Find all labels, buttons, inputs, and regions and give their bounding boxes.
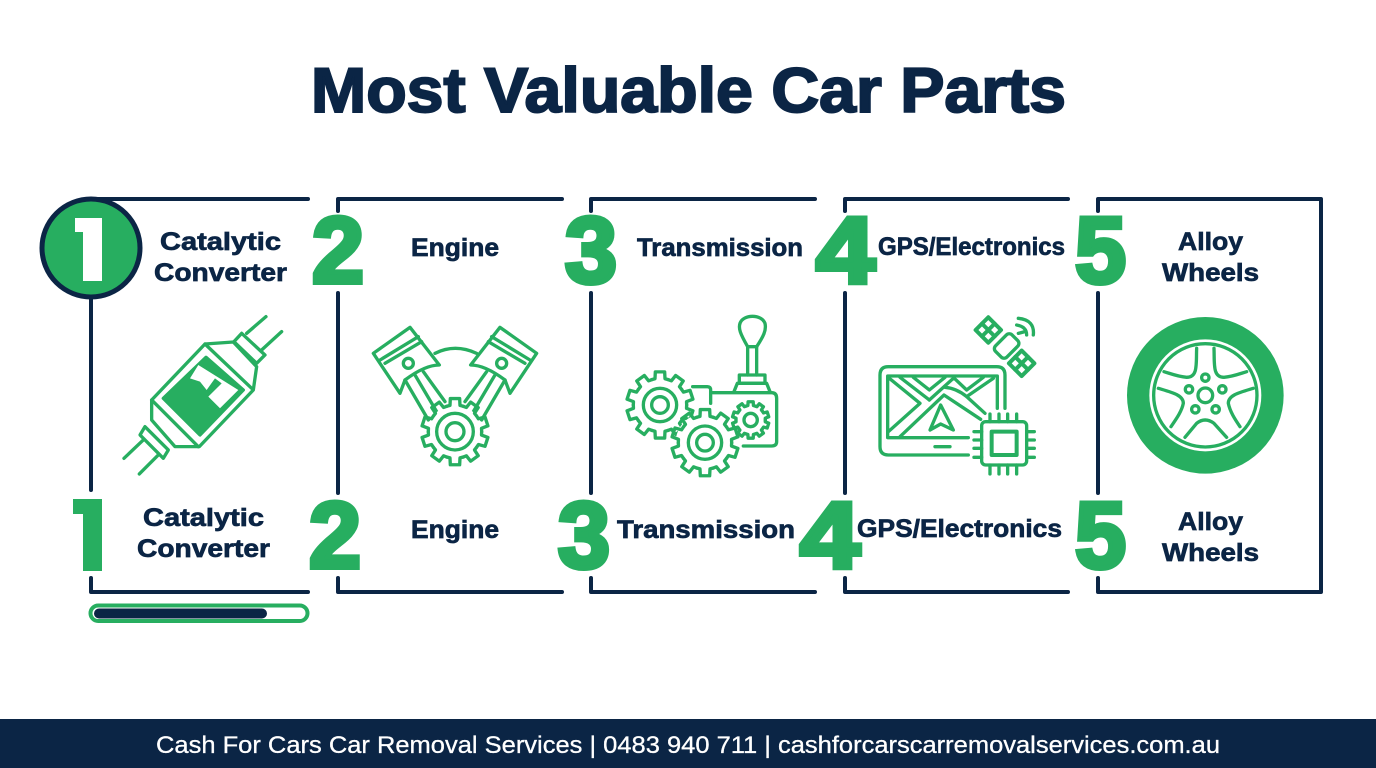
label: catalytic converter lower (137, 504, 270, 563)
icon: transmission (626, 316, 777, 476)
number: 3 upper: 3 (565, 198, 617, 302)
number: 4 upper: 4 (816, 198, 875, 302)
number: 5 upper: 5 (1075, 198, 1126, 302)
footer (0, 719, 1376, 768)
label: transmission lower: Transmission (617, 516, 795, 544)
icon: alloy wheel (1127, 317, 1284, 474)
badge: number 1 (42, 199, 140, 300)
title: Most Valuable Car Parts (311, 56, 1066, 126)
badge: number 1: 1 (66, 200, 117, 300)
heading: catalytic converter: Converter (154, 259, 287, 287)
heading: alloy wheels (1162, 228, 1259, 287)
number: 5 lower: 5 (1075, 482, 1126, 588)
icon: catalytic converter (124, 317, 282, 474)
label: catalytic converter lower: Catalytic (143, 504, 264, 532)
label: alloy wheels lower (1162, 508, 1259, 567)
footer: Cash For Cars Car Removal Services | 0483 940 711 | cashforcarscarremovalservices.com.au (156, 732, 1220, 759)
label: alloy wheels lower: Wheels (1162, 539, 1259, 567)
number: 2 upper: 2 (312, 198, 364, 302)
panel: engine (309, 198, 562, 592)
number: 3 lower: 3 (558, 482, 610, 588)
icon: engine (373, 327, 537, 465)
heading: catalytic converter: Catalytic (160, 228, 281, 256)
number: 2 lower: 2 (309, 482, 361, 588)
heading: engine: Engine (411, 234, 499, 262)
icon: gps electronics (880, 317, 1034, 474)
label: catalytic converter lower: Converter (137, 535, 270, 563)
heading: transmission: Transmission (637, 234, 803, 262)
heading: gps electronics: GPS/Electronics (878, 233, 1065, 261)
panel: alloy wheels (1075, 198, 1321, 592)
heading: catalytic converter (154, 228, 287, 287)
label: alloy wheels lower: Alloy (1178, 508, 1243, 536)
panel: catalytic converter (42, 199, 308, 621)
label: engine lower: Engine (411, 516, 499, 544)
label: gps electronics lower: GPS/Electronics (857, 515, 1062, 543)
number: 1 lower: 1 (64, 480, 119, 592)
heading: alloy wheels: Wheels (1162, 259, 1259, 287)
heading: alloy wheels: Alloy (1178, 228, 1243, 256)
panel: gps electronics (800, 198, 1068, 592)
panel: transmission (558, 198, 815, 592)
number: 4 lower: 4 (800, 482, 860, 588)
progress bar (90, 606, 308, 621)
